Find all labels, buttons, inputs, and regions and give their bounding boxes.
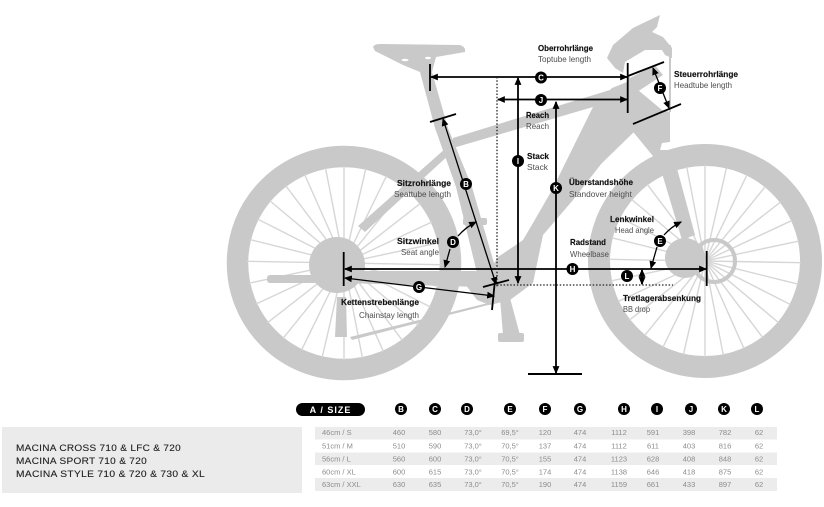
label: top tube <box>538 43 593 64</box>
row: M: 51cm / M <box>322 442 353 450</box>
row: L: 73,0° <box>464 454 482 464</box>
line G: chainstay <box>345 278 494 296</box>
line C: toptube <box>431 76 627 78</box>
table header <box>296 403 763 416</box>
row: M: 474 <box>574 442 586 450</box>
panel: model names: MACINA SPORT 710 & 720 <box>16 456 147 467</box>
label: standover: Standover height <box>569 189 633 199</box>
row: XL <box>322 468 763 476</box>
label: reach: Reach <box>526 110 549 120</box>
row: S: 62 <box>755 428 763 437</box>
line J: reach <box>498 98 627 100</box>
row: S: 474 <box>574 428 586 437</box>
table header: K <box>721 405 727 414</box>
row: L: 155 <box>539 454 551 464</box>
row: XXL: 73,0° <box>464 480 482 489</box>
row: XXL: 474 <box>574 480 586 489</box>
row: M: 510 <box>393 442 405 450</box>
table header: J <box>689 405 693 414</box>
row: L: 56cm / L <box>322 454 351 464</box>
table header: F <box>543 405 548 414</box>
size pill <box>296 403 365 416</box>
row: S: 782 <box>719 428 731 437</box>
row: S: 580 <box>429 428 441 437</box>
label: head tube: Headtube length <box>674 80 732 90</box>
panel: model names <box>2 427 302 493</box>
label: wheelbase: Wheelbase <box>570 249 609 259</box>
row: S <box>322 428 763 437</box>
row: S: 1112 <box>611 428 627 437</box>
row: XL: 62 <box>755 468 763 476</box>
row: XL: 875 <box>719 468 731 476</box>
row: M: 70,5° <box>501 442 519 450</box>
label: wheelbase: Radstand <box>570 237 606 247</box>
letter callouts on drawing: I <box>517 157 519 166</box>
row: L: 848 <box>719 454 731 464</box>
table: geometry values <box>315 427 777 491</box>
line F: head tube <box>653 68 669 108</box>
frame <box>267 15 695 342</box>
head tube ticks <box>628 62 681 124</box>
front wheel <box>599 155 811 367</box>
label: reach: Reach <box>526 121 549 131</box>
label: seat angle: Sitzwinkel <box>397 236 439 246</box>
label: wheelbase <box>570 237 609 259</box>
row: XL: 73,0° <box>464 468 482 476</box>
dotted reference lines <box>497 77 673 288</box>
label: seat tube: Sitzrohrlänge <box>397 178 451 188</box>
label: stack: Stack <box>527 162 549 172</box>
panel: model names: MACINA STYLE 710 & 720 & 730 & XL <box>16 469 205 480</box>
row: XXL <box>322 480 763 489</box>
letter callouts on drawing: C <box>538 74 544 82</box>
arc D lower: seat angle <box>445 249 450 267</box>
line I: stack <box>517 78 519 283</box>
measurement labels <box>341 43 738 320</box>
row: L: 408 <box>683 454 695 464</box>
letter callouts on drawing: J <box>539 96 543 105</box>
row: M: 590 <box>429 442 441 450</box>
table header: G <box>577 405 583 414</box>
row: L: 62 <box>755 454 763 464</box>
ticks for top tube and reach <box>430 63 628 113</box>
label: standover <box>569 177 633 199</box>
row: XL: 418 <box>683 468 695 476</box>
letter callouts on drawing: H <box>570 265 576 274</box>
row: L: 474 <box>574 454 586 464</box>
letter callouts on drawing: B <box>463 180 469 189</box>
arc E upper: head angle <box>664 222 681 235</box>
label: head angle: Lenkwinkel <box>610 214 654 224</box>
row: XXL: 897 <box>719 480 731 489</box>
table header: L <box>755 405 760 414</box>
row: S: 398 <box>683 428 695 437</box>
letter callouts on drawing: F <box>658 84 663 93</box>
row: L: 560 <box>393 454 405 464</box>
label: seat tube <box>394 178 451 199</box>
row: S: 591 <box>647 428 659 437</box>
panel: model names: MACINA CROSS 710 & LFC & 720 <box>16 443 181 454</box>
label: standover: Überstandshöhe <box>569 177 633 187</box>
row: L <box>322 454 763 464</box>
letter callouts on drawing: E <box>657 237 663 246</box>
line K: standover <box>555 102 557 373</box>
label: head tube: Steuerrohrlänge <box>674 69 738 79</box>
arc E lower: head angle <box>651 247 657 268</box>
row: XL: 174 <box>539 468 551 476</box>
row: XXL: 63cm / XXL <box>322 480 361 489</box>
label: BB drop <box>623 293 701 314</box>
label: head tube <box>674 69 738 90</box>
row: S: 69,5° <box>501 428 519 437</box>
label: top tube: Oberrohrlänge <box>538 43 593 53</box>
table header: D <box>464 405 470 414</box>
row: XL: 60cm / XL <box>322 468 356 476</box>
letter callouts on drawing: K <box>553 184 559 193</box>
row: XXL: 661 <box>647 480 659 489</box>
row: XXL: 62 <box>755 480 763 489</box>
label: stack <box>527 151 549 172</box>
row: XL: 474 <box>574 468 586 476</box>
label: head angle: Head angle <box>615 225 654 235</box>
saddle rail holes <box>402 57 431 61</box>
row: L: 628 <box>647 454 659 464</box>
row: XXL: 1159 <box>611 480 627 489</box>
row: M <box>322 442 763 450</box>
table header: E <box>507 405 513 414</box>
table header: H <box>621 405 627 414</box>
bottom bracket ticks <box>483 280 509 310</box>
label: seat tube: Seattube length <box>394 189 451 199</box>
arc D upper: seat angle <box>458 222 476 236</box>
row: XXL: 190 <box>539 480 551 489</box>
bike silhouette <box>238 15 811 370</box>
seat tube tick <box>430 114 456 122</box>
label: BB drop: BB drop <box>623 304 650 314</box>
row: XXL: 635 <box>429 480 441 489</box>
table header: B <box>398 405 404 414</box>
label: stack: Stack <box>527 151 549 161</box>
letter callouts on drawing <box>413 72 666 293</box>
label: chainstay: Chainstay length <box>359 310 419 320</box>
row: S: 460 <box>393 428 405 437</box>
label: chainstay: Kettenstrebenlänge <box>341 297 419 307</box>
row: M: 816 <box>719 442 731 450</box>
row: S: 120 <box>539 428 551 437</box>
row: M: 62 <box>755 442 763 450</box>
letter callouts on drawing: G <box>416 283 422 292</box>
row: XXL: 433 <box>683 480 695 489</box>
row: M: 137 <box>539 442 551 450</box>
row: M: 611 <box>647 442 659 450</box>
standover base <box>528 373 582 375</box>
label: reach <box>526 110 549 131</box>
row: XXL: 70,5° <box>501 480 519 489</box>
size pill: A / SIZE <box>310 405 351 415</box>
table header: I <box>656 405 658 414</box>
line H: wheelbase <box>345 268 706 270</box>
row: S: 46cm / S <box>322 428 352 437</box>
row: XL: 1138 <box>611 468 627 476</box>
row: XL: 70,5° <box>501 468 519 476</box>
label: BB drop: Tretlagerabsenkung <box>623 293 701 303</box>
wheelbase ticks <box>344 251 707 286</box>
label: chainstay <box>341 297 419 320</box>
row: XL: 646 <box>647 468 659 476</box>
label: seat angle <box>397 236 439 257</box>
line L: BB drop <box>641 270 643 284</box>
letter callouts on drawing: D <box>450 238 456 247</box>
row: L: 600 <box>429 454 441 464</box>
row: XXL: 630 <box>393 480 405 489</box>
letter callouts on drawing: L <box>625 272 630 281</box>
row: XL: 615 <box>429 468 441 476</box>
label: seat angle: Seat angle <box>401 247 439 257</box>
row: M: 403 <box>683 442 695 450</box>
row: S: 73,0° <box>464 428 482 437</box>
row: M: 1112 <box>611 442 627 450</box>
rear wheel <box>238 156 450 370</box>
row: L: 70,5° <box>501 454 519 464</box>
table header: C <box>432 405 438 414</box>
label: top tube: Toptube length <box>538 54 591 64</box>
row: L: 1123 <box>611 454 627 464</box>
row: XL: 600 <box>393 468 405 476</box>
line B: seat tube <box>443 119 496 284</box>
measurement lines <box>344 62 707 374</box>
row: M: 73,0° <box>464 442 482 450</box>
label: head angle <box>610 214 654 235</box>
